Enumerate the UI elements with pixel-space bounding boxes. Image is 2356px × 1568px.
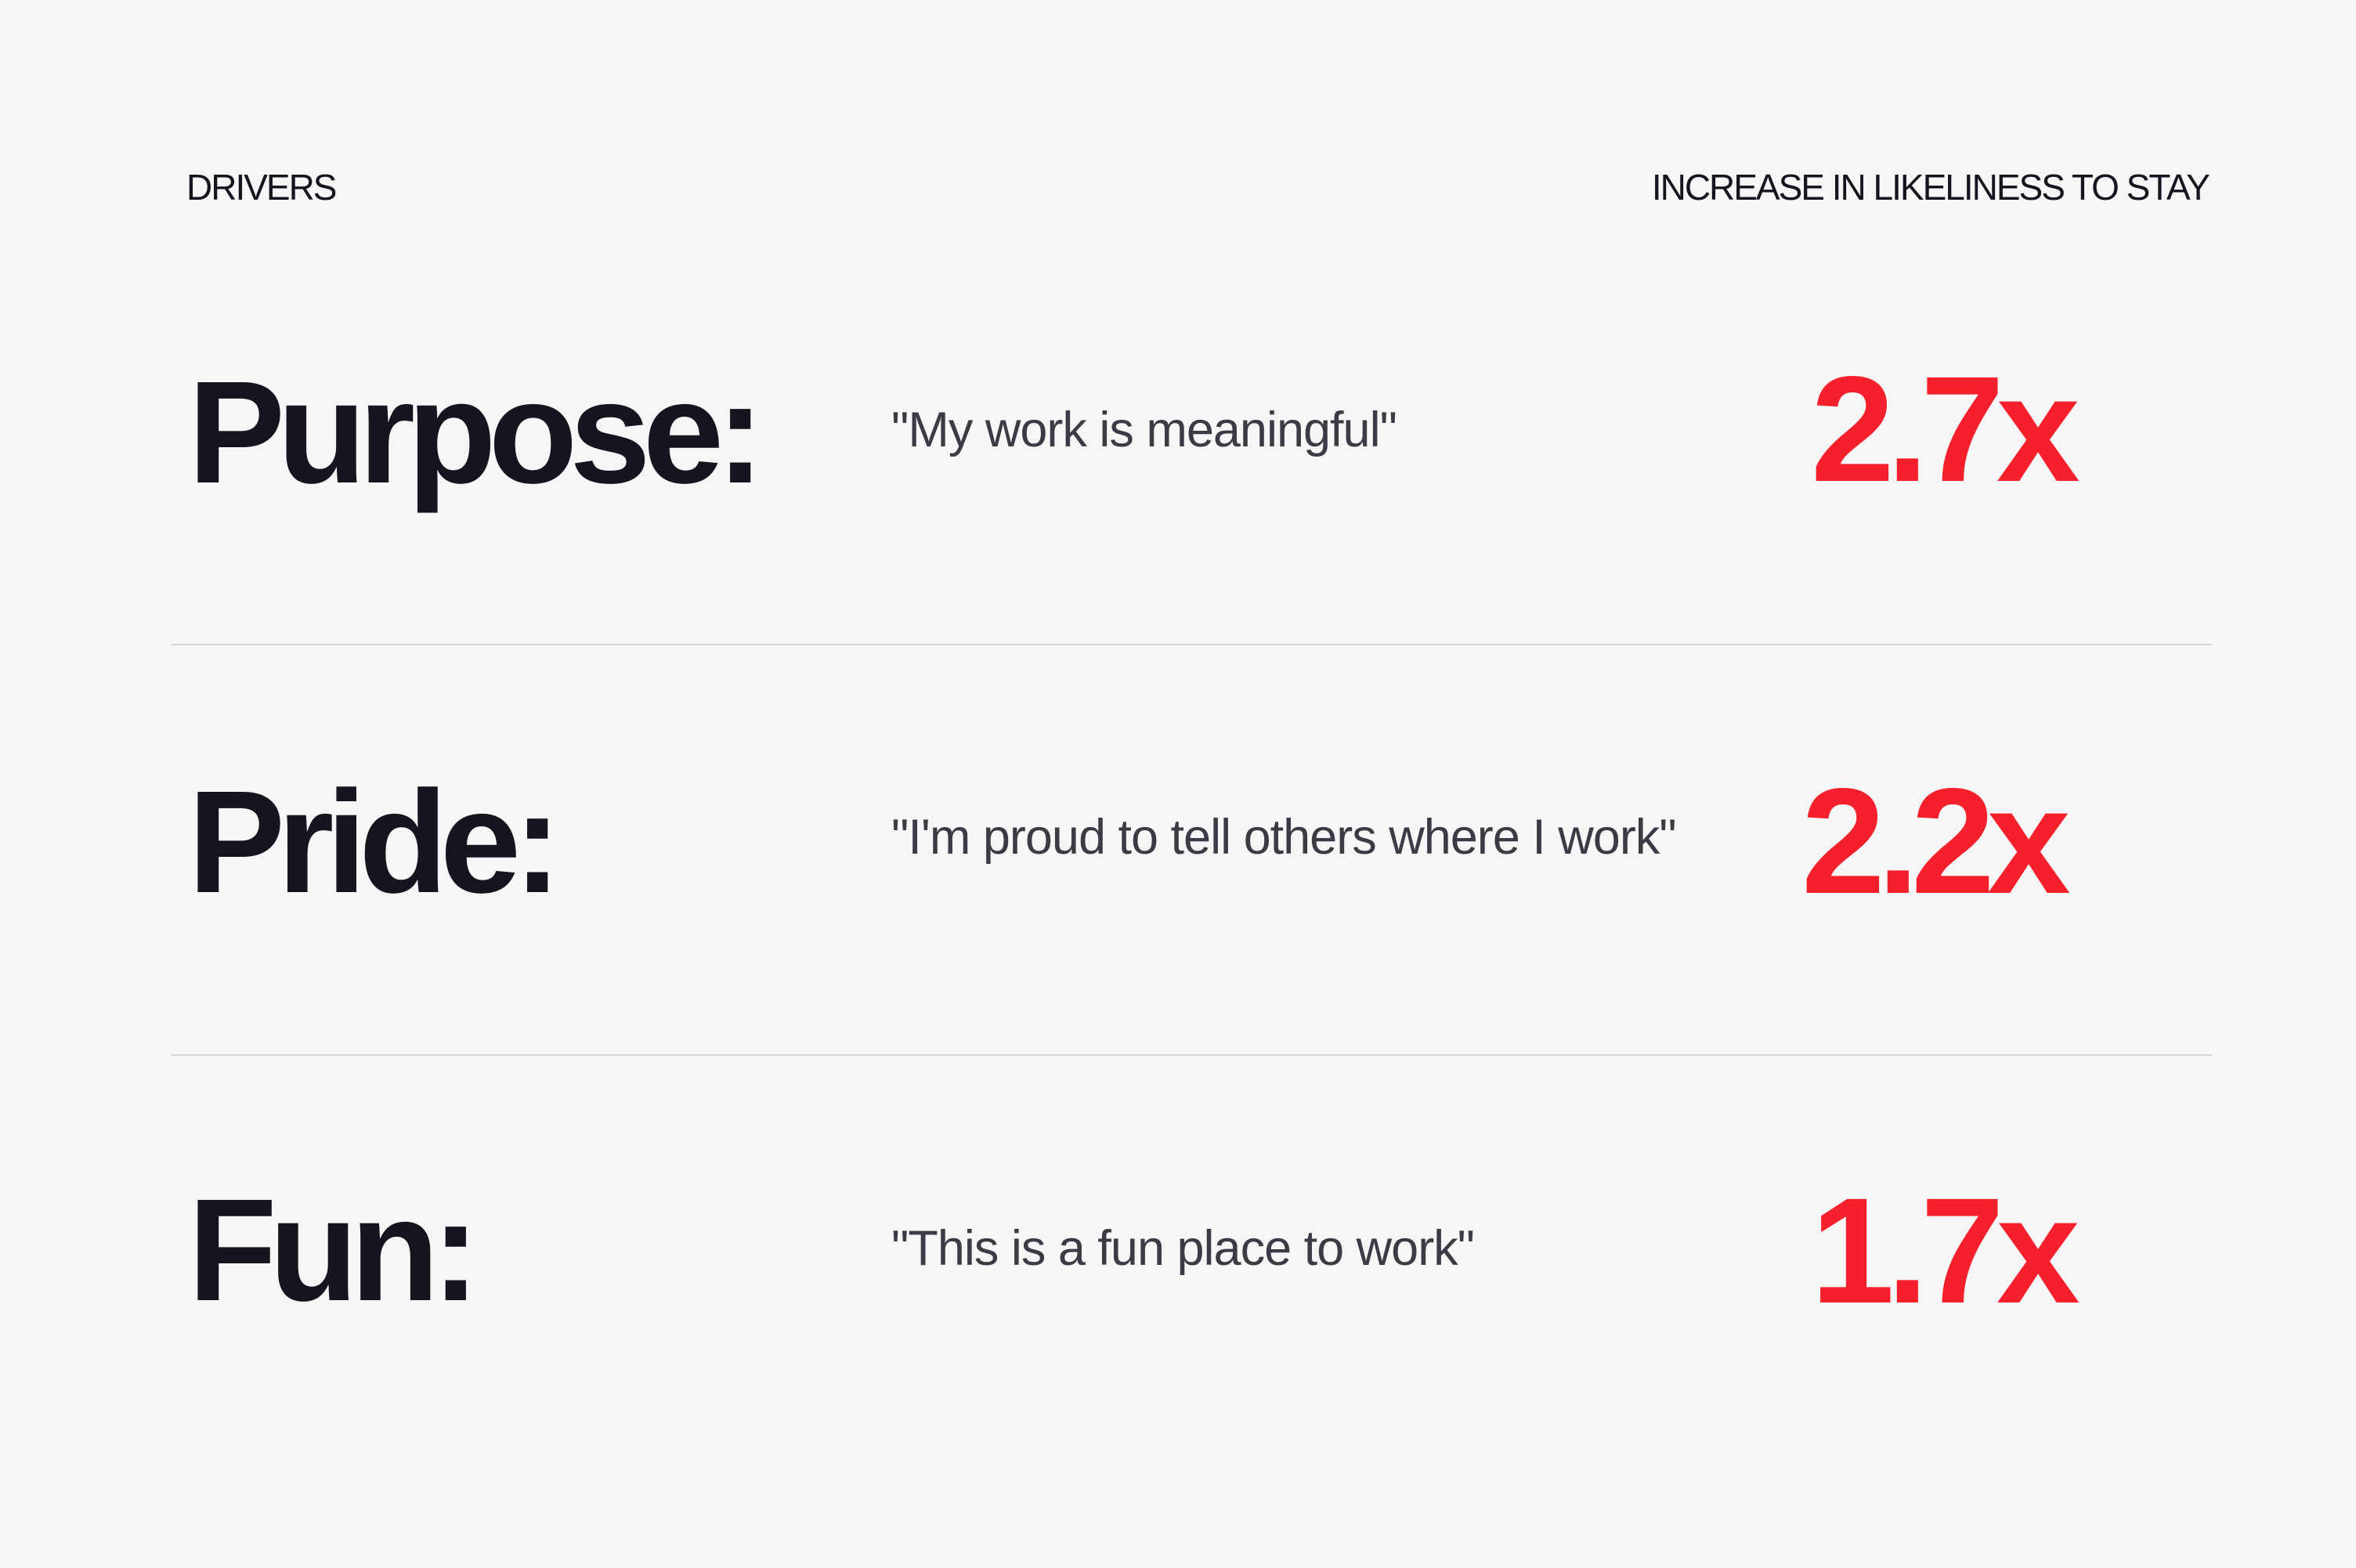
header: drivers: DRIVERS [186,167,335,208]
driver label: fun: Fun: [188,1169,472,1331]
quote: purpose: "My work is meaningful" [891,403,1397,457]
driver label: purpose: Purpose: [188,352,757,514]
number: 2.2x: 2.2x [1801,757,2063,925]
number: 2.7x: 2.7x [1811,345,2072,513]
number: 1.7x: 1.7x [1811,1166,2072,1335]
header: increase in likeliness to stay: INCREASE IN LIKELINESS TO STAY [1652,167,2209,208]
quote: fun: "This is a fun place to work" [891,1221,1474,1276]
quote: pride: "I'm proud to tell others where I work" [891,810,1676,865]
driver label: pride: Pride: [188,761,554,923]
